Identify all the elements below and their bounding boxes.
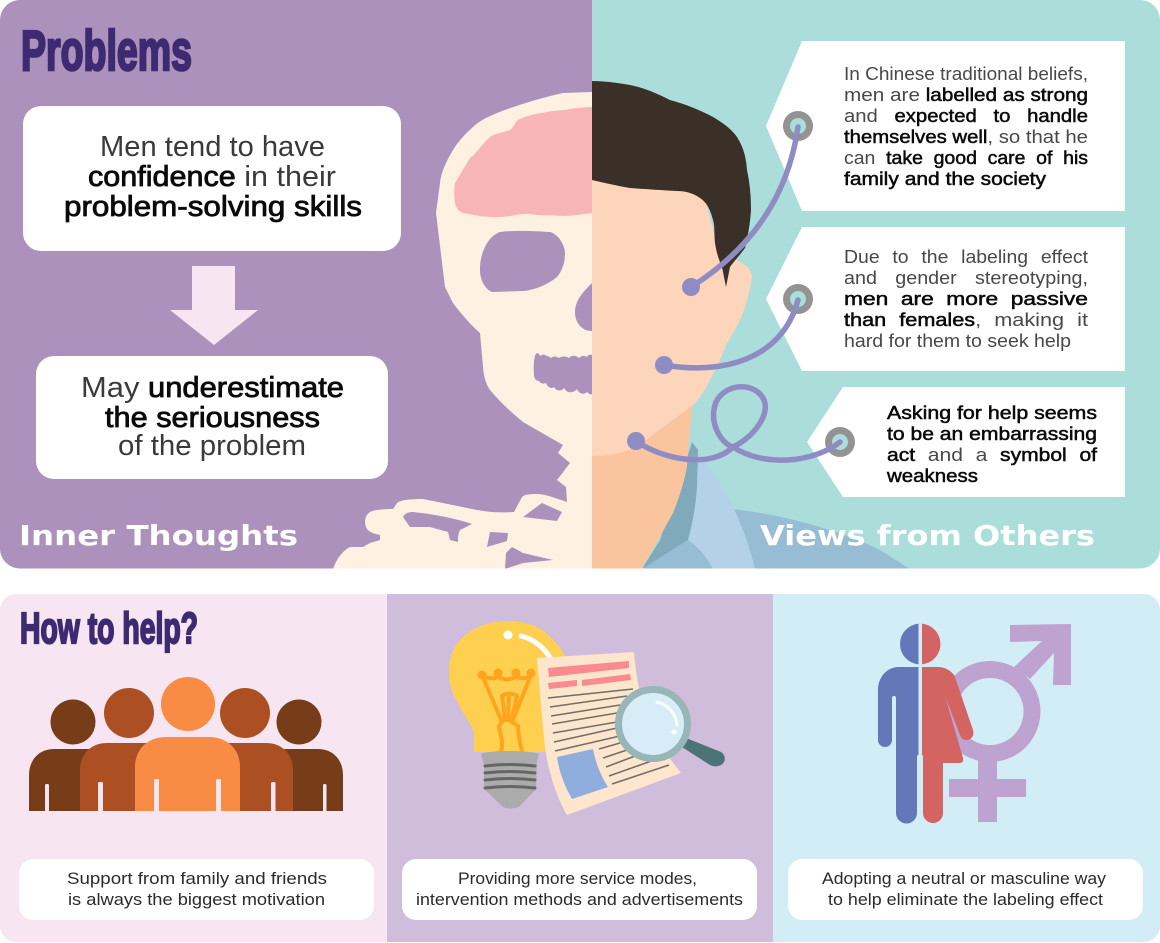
label: Views from Others: Views from Others	[760, 519, 1095, 552]
document	[537, 652, 681, 815]
caption: support: Support from family and friends	[67, 869, 327, 888]
callout: labelled as strong: family and the society	[844, 168, 1047, 189]
text box: underestimate: May underestimate	[81, 372, 344, 404]
callout: labeling effect: than females , making it	[844, 309, 1088, 330]
callout: labelled as strong: and expected to handle	[844, 105, 1088, 126]
callout: labelled as strong: can take good care of his	[844, 147, 1088, 168]
text box: underestimate	[36, 356, 388, 479]
callout: labeling effect: Due to the labeling effect	[844, 246, 1088, 267]
bulb	[449, 621, 566, 752]
text box: underestimate: of the problem	[118, 430, 306, 462]
heading: How to help?: How to help?	[20, 604, 198, 653]
text box: underestimate: the seriousness	[105, 402, 320, 434]
caption: neutral way: Adopting a neutral or masculine way	[822, 869, 1107, 888]
callout: labeling effect: hard for them to seek help	[844, 330, 1071, 351]
callout: embarrassing act: act and a symbol of	[887, 444, 1098, 465]
face	[592, 170, 752, 456]
caption: support	[19, 859, 374, 920]
text box: confidence	[23, 106, 401, 251]
label: Inner Thoughts: Inner Thoughts	[19, 519, 298, 552]
illustration: eye socket	[480, 231, 565, 292]
illustration: brain	[454, 107, 592, 217]
shirt	[642, 509, 910, 569]
callout: labelled as strong	[766, 41, 1125, 211]
illustration: man half	[592, 81, 910, 569]
callout: embarrassing act	[807, 387, 1125, 497]
callout: labeling effect: and gender stereotyping,	[844, 267, 1088, 288]
callout: embarrassing act: weakness	[886, 465, 978, 486]
callout: labeling effect: men are more passive	[844, 288, 1088, 309]
illustration: skeleton half	[333, 92, 592, 569]
neck	[592, 400, 693, 569]
connectors: rings and curves	[627, 111, 855, 460]
caption: service modes	[402, 859, 757, 920]
icon: gender symbols and figure	[878, 624, 1071, 824]
caption: service modes: Providing more service modes,	[458, 869, 697, 888]
callout: embarrassing act: Asking for help seems	[887, 402, 1097, 423]
illustration: teeth	[534, 353, 592, 394]
text box: confidence: Men tend to have	[100, 131, 325, 163]
caption: service modes: intervention methods and advertisements	[416, 890, 743, 909]
text box: confidence: confidence in their	[88, 161, 337, 193]
panel: problems	[0, 0, 1160, 569]
icon: light bulb and document	[449, 621, 725, 815]
callout: labelled as strong: themselves well , so that he	[844, 126, 1088, 147]
icon: group of people	[29, 677, 343, 812]
caption: neutral way	[788, 859, 1143, 920]
text box: confidence: problem-solving skills	[64, 191, 362, 223]
callout: embarrassing act: to be an embarrassing	[887, 423, 1097, 444]
callout: labeling effect	[766, 227, 1125, 371]
panel: how to help	[0, 594, 1160, 942]
magnifier	[682, 738, 725, 766]
callout: labelled as strong: men are labelled as strong	[844, 84, 1088, 105]
caption: support: is always the biggest motivation	[68, 890, 325, 909]
hair	[592, 81, 751, 287]
heading: Problems: Problems	[21, 19, 192, 83]
arrow: down	[170, 266, 258, 345]
callout: labelled as strong: In Chinese traditional beliefs,	[844, 63, 1088, 84]
caption: neutral way: to help eliminate the labeling effect	[828, 890, 1103, 909]
illustration: nose cavity	[575, 283, 592, 331]
